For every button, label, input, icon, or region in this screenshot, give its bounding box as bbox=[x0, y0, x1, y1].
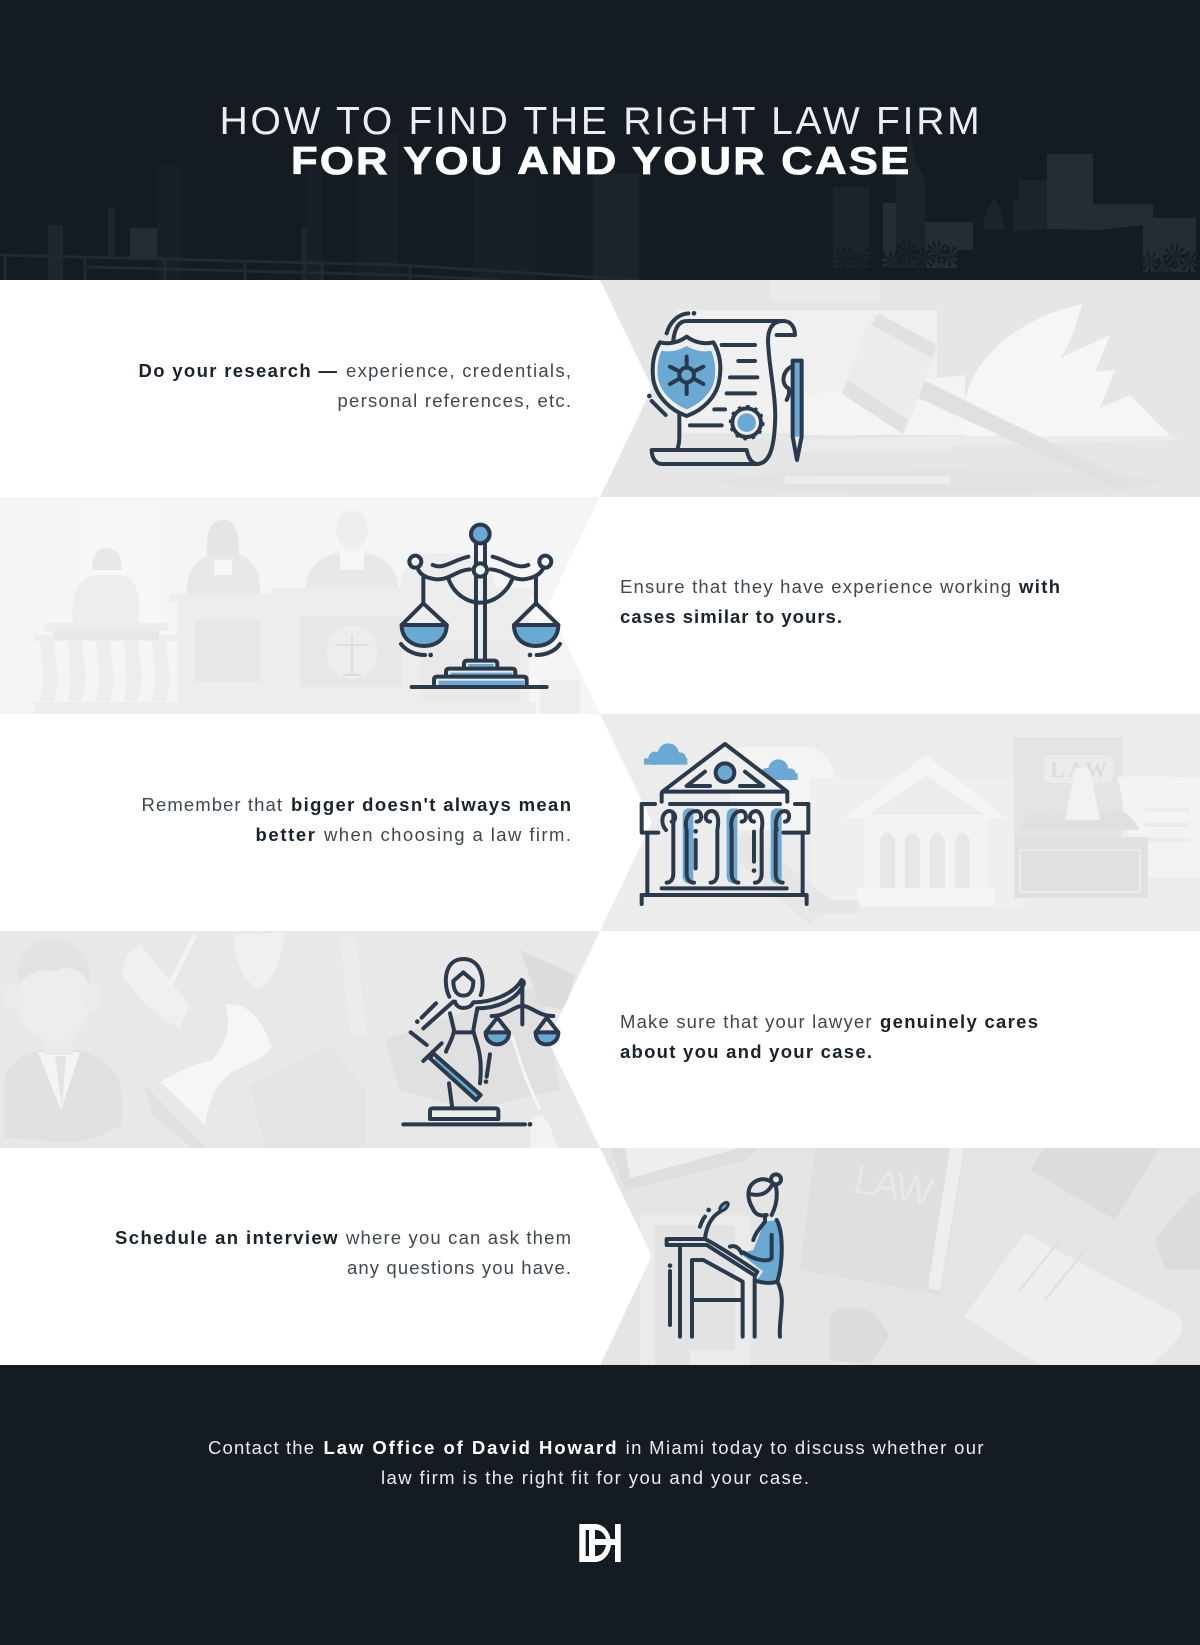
row 3 text: Remember that bbox=[142, 794, 282, 815]
row 5 background illustration: LAW bbox=[850, 1158, 937, 1215]
title bbox=[220, 100, 980, 182]
footer text: Contact the bbox=[208, 1437, 314, 1458]
logo: DH monogram bbox=[579, 1524, 621, 1562]
icon: lady justice bbox=[403, 959, 558, 1127]
row 2 panel: similar cases bbox=[0, 497, 1060, 714]
footer text: in Miami today to discuss whether our bbox=[626, 1437, 984, 1458]
row 2 background illustration bbox=[0, 497, 610, 714]
row 4 text: Make sure that your lawyer bbox=[620, 1011, 872, 1032]
city skyline bbox=[0, 154, 1196, 280]
row 5 text: where you can ask them bbox=[345, 1227, 571, 1248]
row 1 text: Do your research — bbox=[138, 360, 338, 381]
footer panel bbox=[0, 1365, 1200, 1645]
row 3 text: when choosing a law firm. bbox=[323, 824, 571, 845]
icon: woman at podium bbox=[667, 1174, 782, 1337]
row 2 text: Ensure that they have experience working bbox=[620, 576, 1011, 597]
row 2 text: with bbox=[1018, 576, 1060, 597]
row 3 background illustration: LAW bbox=[1050, 757, 1107, 782]
row 4 panel: genuine care bbox=[0, 931, 1038, 1150]
row 1 panel: research bbox=[138, 280, 1200, 497]
icon: courthouse bbox=[642, 743, 808, 904]
row 4 text bbox=[620, 1011, 1038, 1062]
row 1 text bbox=[138, 360, 571, 411]
row 4 text: genuinely cares bbox=[880, 1011, 1038, 1032]
row 5 text: Schedule an interview bbox=[115, 1227, 338, 1248]
footer text bbox=[208, 1437, 984, 1488]
footer text: law firm is the right fit for you and your case. bbox=[381, 1467, 809, 1488]
row 3 panel: firm size bbox=[142, 714, 1200, 931]
row 5 text: any questions you have. bbox=[347, 1257, 571, 1278]
header panel bbox=[0, 0, 1200, 280]
row 3 text: better bbox=[256, 824, 315, 845]
row 5 background illustration bbox=[590, 1148, 1200, 1365]
row 5 text bbox=[115, 1227, 571, 1278]
row 1 text: personal references, etc. bbox=[338, 390, 571, 411]
icon: balance scales bbox=[401, 525, 560, 687]
row 2 text bbox=[620, 576, 1060, 627]
title: FOR YOU AND YOUR CASE bbox=[291, 139, 909, 182]
row 3 text: bigger doesn't always mean bbox=[291, 794, 571, 815]
row 3 text bbox=[142, 794, 571, 845]
row 3 background illustration bbox=[590, 714, 1200, 931]
title: HOW TO FIND THE RIGHT LAW FIRM bbox=[220, 100, 980, 143]
row 4 text: about you and your case. bbox=[620, 1041, 872, 1062]
footer text: Law Office of David Howard bbox=[324, 1437, 616, 1458]
row 1 text: experience, credentials, bbox=[346, 360, 571, 381]
row 5 panel: interview bbox=[115, 1148, 1200, 1365]
row 2 text: cases similar to yours. bbox=[620, 606, 842, 627]
row 4 background illustration bbox=[0, 931, 610, 1150]
icon: contract scroll with shield bbox=[647, 311, 802, 464]
row 1 background illustration bbox=[590, 280, 1200, 497]
